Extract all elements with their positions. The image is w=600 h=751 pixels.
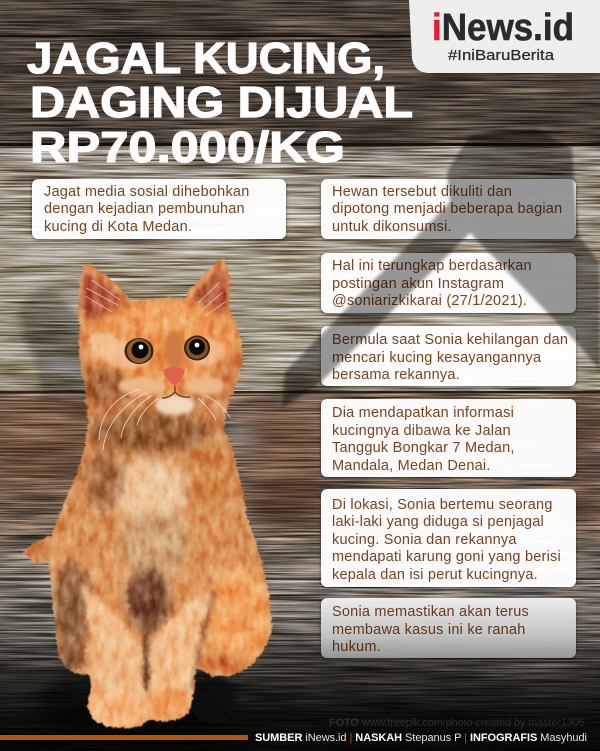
ear interiors [81, 266, 228, 322]
brown weathered patches on lower planks [0, 400, 600, 530]
panel: text box lost cat: bersama rekannya. [332, 367, 460, 383]
panel: intro text box: kucing di Kota Medan. [44, 218, 192, 234]
panel: intro text box [32, 179, 286, 239]
panel: text box lost cat: Bermula saat Sonia kehilangan dan [332, 332, 568, 348]
plank seams [0, 35, 600, 580]
credits line: SUMBER iNews.id | NASKAH Stepanus P | INFOGRAFIS Masyhudi [255, 732, 587, 744]
fur noise [15, 250, 280, 735]
left eye [124, 338, 154, 364]
nose and mouth [162, 367, 190, 398]
panel: text box instagram: postingan akun Instagram [332, 276, 504, 292]
title: DAGING DIJUAL [30, 78, 413, 127]
panel: text box conclusion: membawa kasus ini ke ranah [332, 622, 526, 638]
right eye [184, 336, 210, 360]
panel: text box information: Mandala, Medan Denai. [332, 458, 491, 474]
photo credit: FOTO www.freepik.com/photo created by master1305 [329, 717, 585, 729]
neck ruff [88, 412, 212, 452]
panel: text box skinned: Hewan tersebut dikuliti dan [332, 184, 512, 200]
paws [87, 688, 192, 727]
pale weathered patches [225, 300, 600, 450]
cat face [85, 280, 230, 450]
panel: text box instagram: @soniarizkikarai (27/1/2021). [332, 293, 527, 309]
title: RP70.000/KG [30, 123, 345, 172]
ground shadow under cat [35, 662, 237, 738]
panel: text box conclusion: hukum. [332, 639, 381, 655]
panel: text box location: kepala dan isi perut kucingnya. [332, 566, 538, 582]
cat silhouette and fur [15, 250, 280, 735]
panel: text box lost cat [321, 326, 576, 386]
panel: text box information: Tangguk Bongkar 7 Medan, [332, 440, 515, 456]
panel: text box information: Dia mendapatkan informasi [332, 405, 514, 421]
panel: text box lost cat: mencari kucing kesayangannya [332, 350, 541, 366]
panel: text box instagram [321, 253, 576, 313]
panel: text box information [321, 399, 576, 477]
head [86, 299, 238, 391]
flank [208, 567, 268, 663]
tagline: #IniBaruBerita [448, 47, 555, 64]
illustration: orange kitten [22, 257, 274, 732]
panel: text box location: Di lokasi, Sonia bertemu seorang [332, 496, 553, 512]
panel: text box skinned: dipotong menjadi beberapa bagian [332, 201, 562, 217]
panel: intro text box: dengan kejadian pembunuhan [44, 201, 245, 217]
ear hairs [85, 280, 225, 316]
panel: intro text box: Jagat media sosial dihebohkan [44, 184, 250, 200]
panel: text box location: mendapati karung goni yang berisi [332, 549, 561, 565]
panel: text box location: laki-laki yang diduga si penjagal [332, 514, 544, 530]
panel: text box information: kucingnya dibawa ke Jalan [332, 422, 511, 438]
chest [106, 460, 194, 520]
panel: text box conclusion: Sonia memastikan akan terus [332, 604, 529, 620]
panel: text box location: kucing. Sonia dan rekannya [332, 532, 517, 548]
whiskers [99, 389, 230, 450]
wordmark: iNews.id [432, 7, 574, 49]
panel: text box skinned [321, 179, 576, 239]
panel: text box location [321, 489, 576, 587]
title: JAGAL KUCING, [27, 34, 385, 83]
panel: text box conclusion [321, 598, 576, 658]
panel: text box skinned: untuk dikonsumsi. [332, 218, 452, 234]
orange bar [0, 735, 248, 740]
panel: text box instagram: Hal ini terungkap berdasarkan [332, 258, 532, 274]
front legs [82, 585, 214, 712]
